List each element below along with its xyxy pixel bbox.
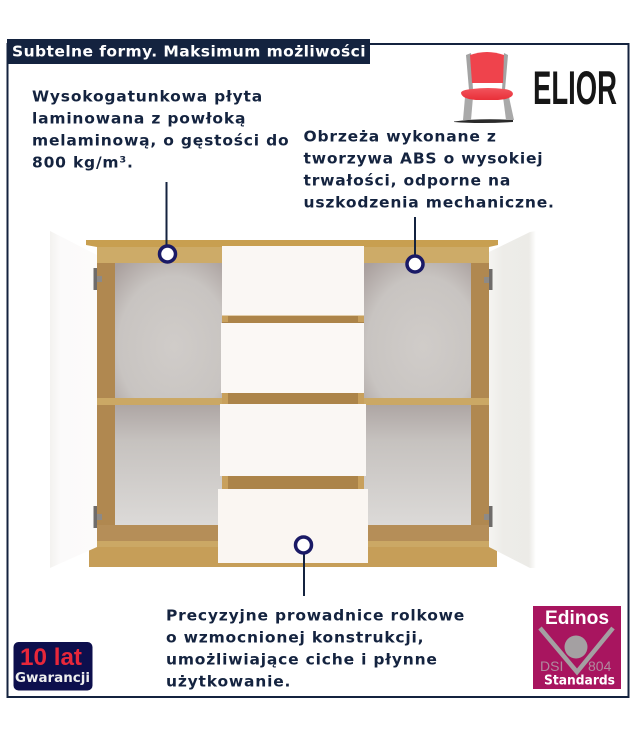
shelf [97, 398, 489, 405]
plinth [89, 547, 497, 567]
badge: 10 year warranty [14, 642, 92, 690]
right compartment lower [364, 405, 471, 526]
callout marker: ABS edge [407, 217, 423, 272]
text block: ABS edges: Obrzeża wykonane z [304, 128, 497, 146]
badge: Edinos DSI 804 Standards: DSI [540, 658, 563, 674]
bottom board edge [97, 541, 489, 547]
floor of cabinet [97, 525, 489, 541]
badge: 10 year warranty: Gwarancji [15, 670, 90, 686]
text block: board material: melaminową, o gęstości do [32, 132, 289, 150]
badge: 10 year warranty: 10 lat [20, 644, 82, 671]
top board [86, 240, 498, 247]
text block: drawer runners [166, 606, 465, 690]
text block: drawer runners: Precyzyjne prowadnice rolkowe [166, 606, 465, 624]
callout marker: board [160, 182, 176, 262]
right side panel [471, 263, 489, 526]
left hinges [94, 268, 97, 528]
text block: ABS edges: uszkodzenia mechaniczne. [304, 194, 555, 212]
heading: Subtelne formy. Maksimum możliwości [12, 42, 366, 60]
text block: board material [32, 88, 289, 172]
text block: board material: laminowana z powłoką [32, 110, 246, 128]
text block: drawer runners: użytkowanie. [166, 672, 291, 690]
left compartment upper [115, 263, 222, 398]
left side panel [97, 263, 115, 526]
badge: Edinos DSI 804 Standards: 804 [588, 658, 612, 674]
callout marker: runners [296, 537, 312, 596]
badge: Edinos DSI 804 Standards [533, 606, 621, 689]
right door [489, 231, 536, 568]
drawer fronts [222, 246, 364, 316]
badge: Edinos DSI 804 Standards: Standards [544, 674, 615, 688]
text block: ABS edges: trwałości, odporne na [304, 172, 511, 190]
right compartment upper [364, 263, 471, 398]
cabinet [50, 231, 536, 568]
left compartment lower [115, 405, 222, 526]
text block: ABS edges [304, 128, 555, 212]
text block: drawer runners: umożliwiające ciche i płynne [166, 650, 438, 668]
top rail [97, 247, 489, 263]
badge: Edinos DSI 804 Standards: Edinos [545, 608, 609, 629]
cabinet body [97, 247, 489, 567]
text block: board material: 800 kg/m³. [32, 154, 134, 172]
text block: board material: Wysokogatunkowa płyta [32, 88, 263, 106]
right hinges [489, 269, 492, 527]
text block: ABS edges: tworzywa ABS o wysokiej [304, 150, 543, 168]
icon: Elior chair logo [454, 52, 514, 123]
gaps between drawers [222, 316, 364, 406]
left door [50, 231, 97, 568]
text block: drawer runners: o wzmocnionej konstrukcji, [166, 628, 424, 646]
